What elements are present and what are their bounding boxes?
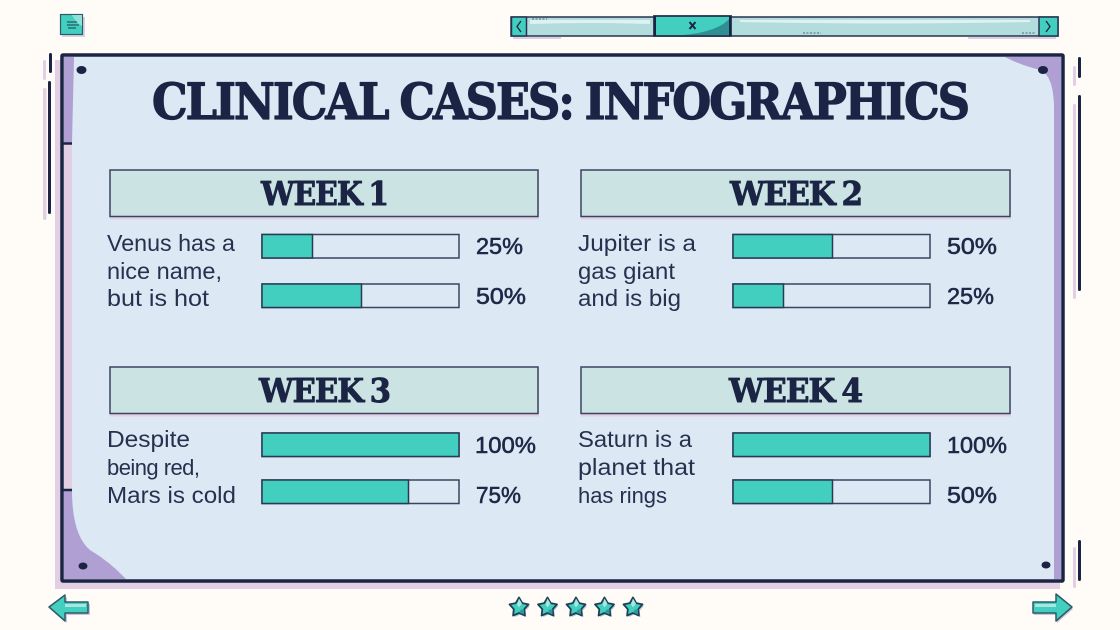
title: CLINICAL CASES: INFOGRAPHICS xyxy=(152,72,968,131)
bar: 25% xyxy=(262,233,523,259)
bar: 25% xyxy=(733,283,994,309)
heading: week 4: WEEK 4 xyxy=(728,371,862,410)
bar: 75%: 75% xyxy=(476,482,521,508)
text: week 1 description: but is hot xyxy=(107,285,210,311)
bar: 50% xyxy=(733,233,997,259)
text: week 2 description: Jupiter is a xyxy=(578,230,696,256)
bar: 100% xyxy=(262,432,536,458)
text: week 2 description: and is big xyxy=(578,285,681,311)
star 4 xyxy=(595,598,616,617)
heading: week 4 xyxy=(581,367,1011,416)
star 2 xyxy=(538,598,558,617)
bar: 50% xyxy=(262,283,526,309)
icon: small note window xyxy=(60,14,85,37)
panel: week 2 xyxy=(578,170,1011,311)
text: week 4 description: Saturn is a xyxy=(578,426,692,452)
panel: week 1 xyxy=(107,170,539,311)
text: week 4 description: has rings xyxy=(578,483,667,508)
heading: week 2 xyxy=(581,170,1011,220)
text: week 4 description xyxy=(578,426,696,508)
text: week 1 description xyxy=(107,230,235,311)
side strokes: right xyxy=(1073,57,1081,588)
heading: week 3 xyxy=(110,367,539,416)
icon: next arrow xyxy=(1033,594,1073,623)
main panel frame xyxy=(55,55,1063,589)
heading: week 1: WEEK 1 xyxy=(260,174,388,213)
side strokes: left xyxy=(43,53,52,220)
text: week 1 description: nice name, xyxy=(107,258,222,284)
star 3 xyxy=(566,598,587,617)
bar: 50%: 50% xyxy=(947,482,997,508)
bar: 50%: 50% xyxy=(476,283,526,309)
text: week 3 description: Mars is cold xyxy=(107,482,236,508)
bar: 75% xyxy=(262,480,521,508)
text: week 1 description: Venus has a xyxy=(107,230,235,256)
bar: 100% xyxy=(733,432,1007,458)
bar: 25%: 25% xyxy=(476,233,523,259)
bar: 50% xyxy=(733,480,997,508)
text: week 3 description: Despite xyxy=(107,426,190,452)
icon: previous arrow xyxy=(49,595,90,623)
text: week 3 description: being red, xyxy=(107,455,200,480)
text: week 4 description: planet that xyxy=(578,454,696,480)
panel: week 3 xyxy=(107,367,539,508)
text: week 3 description xyxy=(107,426,236,508)
bar: 100%: 100% xyxy=(947,432,1007,458)
panel: week 4 xyxy=(578,367,1011,508)
star 1 xyxy=(510,598,530,617)
icon: rating stars xyxy=(510,598,644,617)
heading: week 3: WEEK 3 xyxy=(258,371,390,410)
scrollbar xyxy=(511,16,1058,39)
heading: week 2: WEEK 2 xyxy=(729,174,862,213)
bar: 50%: 50% xyxy=(947,233,997,259)
text: week 2 description xyxy=(578,230,696,311)
heading: week 1 xyxy=(110,170,539,220)
text: week 2 description: gas giant xyxy=(578,258,676,284)
bar: 100%: 100% xyxy=(475,432,536,458)
bar: 25%: 25% xyxy=(947,283,994,309)
star 5 xyxy=(624,598,644,617)
